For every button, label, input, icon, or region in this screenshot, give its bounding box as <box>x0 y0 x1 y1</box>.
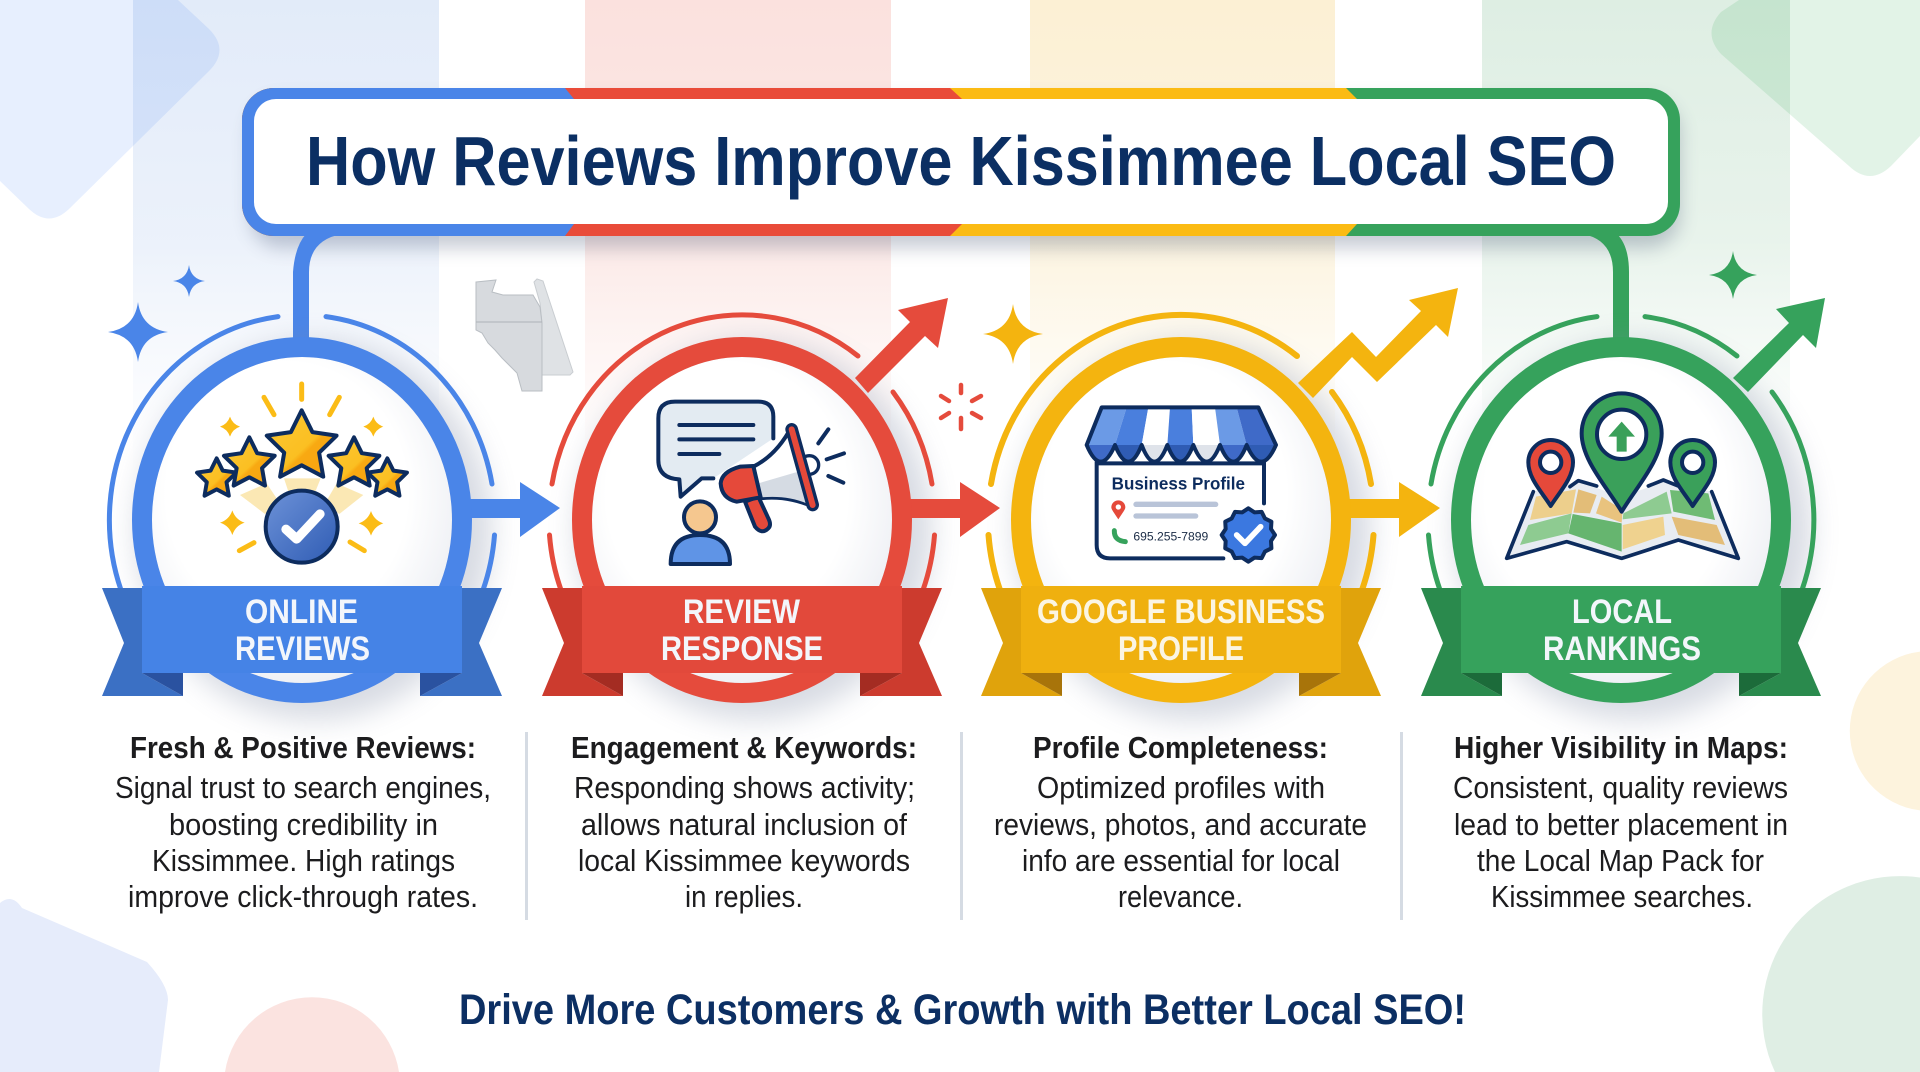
decor: right yellow circle <box>1850 652 1920 810</box>
sparkle: blue small <box>173 265 205 297</box>
text block: higher visibility in maps: Consistent, quality reviews <box>1453 770 1788 805</box>
background band: green <box>1482 0 1790 480</box>
text block: higher visibility in maps: Higher Visibility in Maps: <box>1454 730 1788 765</box>
ribbon: online reviews: REVIEWS <box>235 630 370 668</box>
icon: five stars with check badge <box>197 384 407 563</box>
ribbon: review response <box>542 586 942 696</box>
text block: profile completeness: reviews, photos, and accurate <box>994 807 1367 842</box>
connector: title to local rankings <box>1583 234 1629 345</box>
text block: fresh and positive reviews: Fresh & Positive Reviews: <box>130 730 476 765</box>
text block: engagement and keywords: Engagement & Keywords: <box>571 730 917 765</box>
decor: bottom-left blue shape <box>0 899 168 1072</box>
text block: profile completeness: Optimized profiles with <box>1037 770 1325 805</box>
ribbon: google business profile: GOOGLE BUSINESS <box>1037 593 1325 631</box>
text block: higher visibility in maps: Kissimmee searches. <box>1491 879 1753 914</box>
sparkle: green <box>1709 251 1757 299</box>
ribbon: online reviews <box>102 586 502 696</box>
panel: google business profile badge <box>981 288 1458 720</box>
title banner <box>242 88 1680 236</box>
text block: engagement and keywords: in replies. <box>685 879 803 914</box>
decor: bottom-right green circle <box>1762 876 1920 1072</box>
ribbon: review response: REVIEW <box>683 593 801 631</box>
text block: engagement and keywords: allows natural inclusion of <box>581 807 907 842</box>
ribbon: local rankings <box>1421 586 1821 696</box>
text block: fresh and positive reviews <box>115 730 491 914</box>
icon: map with location pins <box>1507 393 1738 558</box>
background band: yellow <box>1030 0 1335 480</box>
title text: How Reviews Improve Kissimmee Local SEO <box>306 122 1616 200</box>
text block: higher visibility in maps: the Local Map Pack for <box>1477 843 1764 878</box>
sparkle: yellow <box>983 304 1043 364</box>
ribbon: review response: RESPONSE <box>661 630 823 668</box>
divider lines <box>525 732 1403 920</box>
ribbon: online reviews: ONLINE <box>245 593 358 631</box>
icon: storefront business profile card <box>1087 407 1276 562</box>
background band: blue <box>133 0 439 480</box>
ribbon: google business profile <box>981 586 1381 696</box>
text block: profile completeness: relevance. <box>1118 879 1243 914</box>
text block: fresh and positive reviews: Signal trust to search engines, <box>115 770 491 805</box>
icon: storefront business profile card: 695.255-7899 <box>1133 529 1209 543</box>
ribbon: local rankings: RANKINGS <box>1543 630 1701 668</box>
decor: bottom red circle <box>225 997 399 1072</box>
text block: fresh and positive reviews: improve click-through rates. <box>128 879 478 914</box>
map of Florida counties <box>476 279 573 391</box>
text block: engagement and keywords: local Kissimmee keywords <box>578 843 910 878</box>
panel: online reviews badge <box>102 317 560 720</box>
ribbon: local rankings: LOCAL <box>1572 593 1672 631</box>
text block: profile completeness: info are essential for local <box>1022 843 1340 878</box>
text block: higher visibility in maps <box>1453 730 1788 914</box>
text block: engagement and keywords: Responding shows activity; <box>574 770 915 805</box>
icon: storefront business profile card: Business Profile <box>1112 474 1245 494</box>
burst: red <box>941 385 981 429</box>
sparkle: blue large <box>108 302 168 362</box>
decor: top-right green diamond <box>1712 0 1920 176</box>
text block: fresh and positive reviews: boosting credibility in <box>169 807 438 842</box>
panel: review response badge <box>542 298 1000 720</box>
text block: higher visibility in maps: lead to better placement in <box>1454 807 1788 842</box>
text block: profile completeness <box>994 730 1367 914</box>
background band: red <box>585 0 891 480</box>
title shadow <box>250 100 1680 248</box>
footer tagline: Drive More Customers & Growth with Better Local SEO! <box>459 986 1466 1034</box>
text block: profile completeness: Profile Completeness: <box>1033 730 1328 765</box>
text block: fresh and positive reviews: Kissimmee. High ratings <box>152 843 455 878</box>
text block: engagement and keywords <box>571 730 917 914</box>
decor: top-left blue diamond <box>0 0 220 218</box>
ribbon: google business profile: PROFILE <box>1118 630 1244 668</box>
icon: speech bubble, megaphone and person <box>658 402 844 564</box>
panel: local rankings badge <box>1421 298 1825 720</box>
connector: title to online reviews <box>293 234 342 345</box>
